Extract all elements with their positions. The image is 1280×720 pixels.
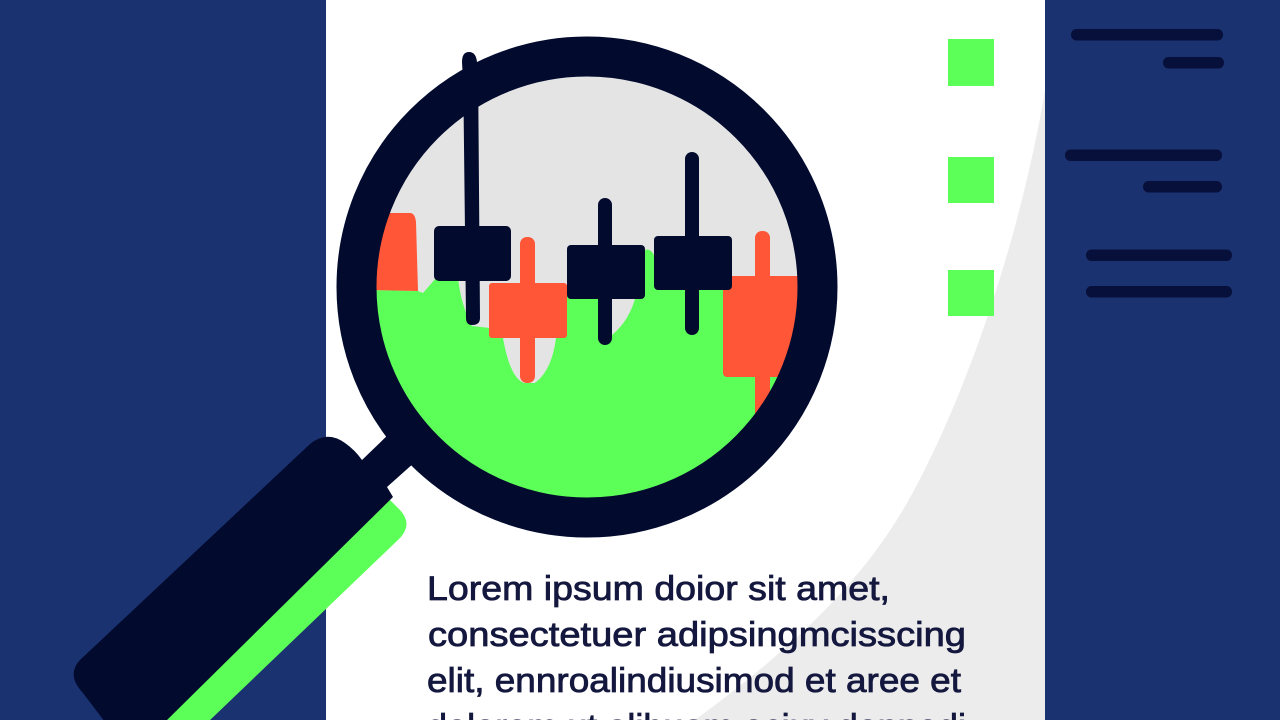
panel: central white page: [326, 0, 1045, 720]
lens background: [390, 76, 798, 383]
wick tip above the ring: [462, 52, 478, 80]
text block: lorem ipsum paragraph: elit, ennroalindiusimod et aree et: [427, 662, 962, 700]
text block: lorem ipsum paragraph: Lorem ipsum doior sit amet,: [427, 570, 890, 608]
chart: candlesticks seen through the lens: [370, 60, 808, 505]
green area chart: [370, 250, 800, 505]
icon: magnifying glass handle: [74, 433, 415, 720]
text block: lorem ipsum paragraph: consectetuer adipsingmcisscing: [428, 616, 966, 654]
dark candle 2: [567, 198, 645, 345]
dark candle 1: [434, 106, 511, 325]
text block: lorem ipsum paragraph: [427, 570, 966, 720]
red candle far right: [723, 231, 798, 414]
panel: left navy column: [0, 0, 326, 720]
text placeholder lines: right column: [1065, 29, 1232, 298]
red candle far left: [376, 213, 418, 291]
icon: magnifying glass ring: [356, 56, 818, 518]
panel: grey curved background shape: [695, 90, 1045, 720]
panel: right navy column: [1045, 0, 1280, 720]
red candle centre: [489, 237, 567, 383]
handle dark body and neck: [74, 433, 415, 720]
handle green edge: [160, 495, 406, 720]
icon: green square markers: [948, 39, 994, 316]
dark candle 3: [654, 152, 732, 335]
